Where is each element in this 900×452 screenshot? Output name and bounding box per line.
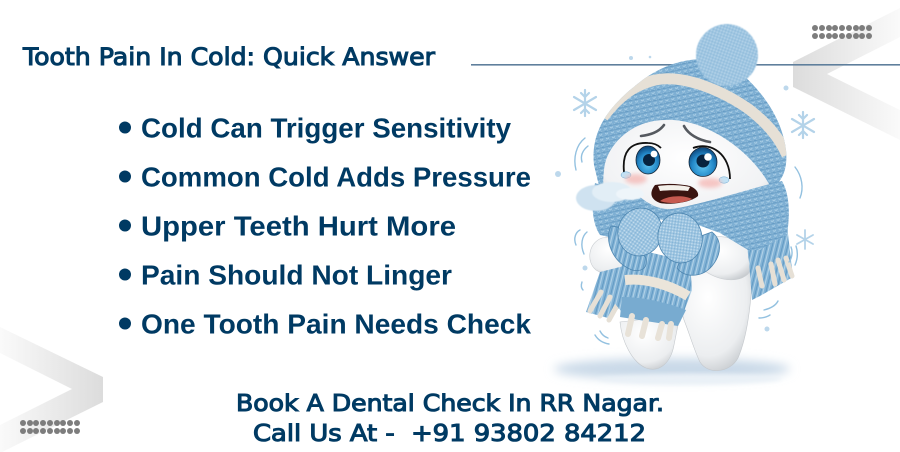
title rule	[471, 64, 900, 66]
scarf right tail	[745, 225, 793, 300]
mittens	[613, 203, 707, 267]
snowflake: upper left	[574, 90, 596, 116]
bullet 4: Pain Should Not Linger	[141, 260, 452, 290]
tooth face	[603, 120, 769, 215]
bullet 1: Cold Can Trigger Sensitivity	[141, 112, 511, 144]
call to action	[236, 391, 664, 447]
dot grid: top right	[812, 25, 872, 39]
bullet 5: One Tooth Pain Needs Check	[141, 308, 531, 340]
tooth roots	[620, 258, 753, 371]
cta line 1: Book A Dental Check In RR Nagar.	[236, 391, 664, 417]
snowflake: upper right	[792, 112, 814, 138]
frosty breath	[576, 182, 644, 211]
bullet 2: Common Cold Adds Pressure	[141, 162, 531, 192]
bullet list	[119, 112, 531, 340]
scarf wrap	[593, 181, 789, 250]
tooth arms	[590, 235, 754, 280]
right eye	[689, 146, 730, 179]
snow ground shadow	[554, 358, 790, 384]
small snow specks	[555, 56, 788, 331]
dot grid: bottom left	[20, 420, 80, 434]
hat cream band	[603, 79, 787, 155]
mitten cuffs	[609, 226, 720, 275]
scarf left tail	[586, 262, 640, 320]
snowflake: lower right	[797, 230, 813, 249]
cheeks blush	[625, 174, 722, 188]
pom pom	[696, 24, 758, 86]
shiver motion lines	[575, 138, 802, 344]
open mouth	[651, 184, 698, 204]
bullet 3: Upper Teeth Hurt More	[141, 210, 456, 242]
chevron: top right	[793, 8, 900, 140]
chevron: bottom left	[0, 327, 103, 452]
left eye	[624, 143, 661, 174]
illustration: cold tooth mascot	[554, 24, 814, 384]
cta line 2: phone: Call Us At - +91 93802 84212	[253, 421, 646, 447]
scarf front tail	[612, 250, 692, 338]
beanie hat	[593, 59, 787, 190]
title: Tooth Pain In Cold: Quick Answer	[22, 43, 435, 71]
eyebrows	[641, 125, 710, 142]
tears	[621, 172, 729, 183]
